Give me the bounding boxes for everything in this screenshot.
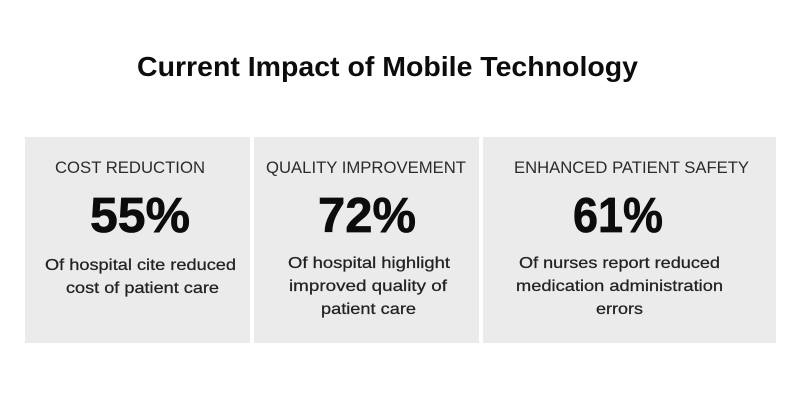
- text block: quality improvement description: [288, 255, 451, 318]
- panel: cost reduction: [25, 137, 250, 343]
- title: Current Impact of Mobile Technology: [137, 51, 638, 82]
- text block: enhanced patient safety description: medication administration: [516, 278, 723, 295]
- text block: quality improvement description: patient care: [321, 301, 416, 318]
- text block: cost reduction description: [45, 257, 236, 297]
- text block: quality improvement description: improved quality of: [289, 278, 448, 295]
- text block: enhanced patient safety description: errors: [596, 301, 643, 318]
- panel: enhanced patient safety: [483, 137, 776, 343]
- text block: cost reduction description: cost of patient care: [66, 280, 219, 297]
- text block: enhanced patient safety description: Of nurses report reduced: [519, 255, 720, 272]
- heading: cost reduction: COST REDUCTION: [55, 159, 205, 177]
- stat: 61%: 61%: [573, 189, 663, 243]
- stat: 55%: 55%: [90, 189, 190, 243]
- text block: enhanced patient safety description: [516, 255, 723, 318]
- stat: 72%: 72%: [318, 189, 416, 243]
- text block: cost reduction description: Of hospital cite reduced: [45, 257, 236, 274]
- heading: quality improvement: QUALITY IMPROVEMENT: [266, 159, 466, 177]
- heading: enhanced patient safety: ENHANCED PATIENT SAFETY: [514, 159, 749, 177]
- text block: quality improvement description: Of hospital highlight: [288, 255, 451, 272]
- panel: quality improvement: [254, 137, 479, 343]
